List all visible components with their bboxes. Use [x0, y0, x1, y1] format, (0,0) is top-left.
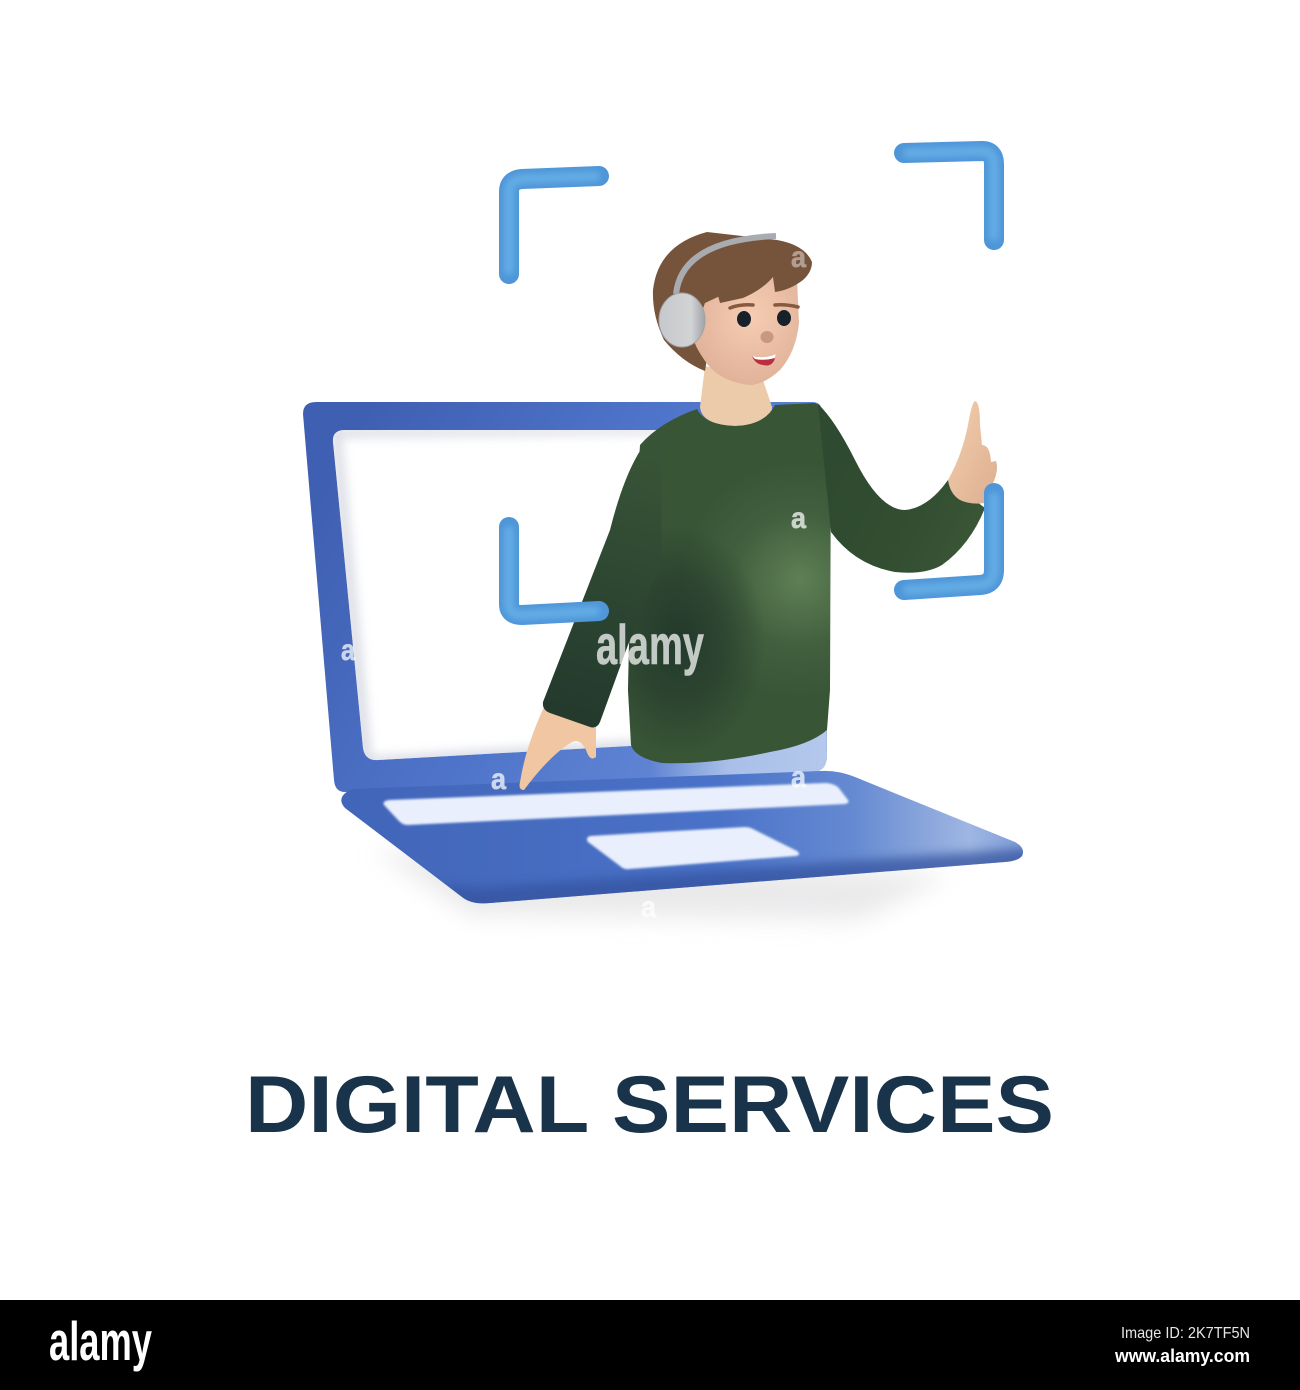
right hand: [948, 401, 997, 504]
eyebrows: [730, 305, 798, 308]
mouth: [752, 354, 776, 366]
fringe: [677, 238, 812, 303]
laptop shadow: [375, 850, 950, 920]
footer logo: alamy: [49, 1310, 152, 1372]
base front edge shading: [440, 848, 1030, 912]
website: www.alamy.com: [1114, 1346, 1250, 1366]
focus brackets: [509, 151, 994, 615]
person: body and arms: [520, 366, 997, 790]
left hand: [520, 705, 596, 790]
laptop base: [341, 771, 1023, 903]
image id: Image ID: 2K7TF5N: [1121, 1325, 1250, 1342]
watermark: alamy: a: [791, 502, 806, 535]
laptop lid pale right edge: [640, 730, 827, 778]
neck: [700, 366, 772, 426]
person: head with headset: [653, 232, 812, 385]
watermark: alamy: a: [791, 761, 806, 794]
watermark: alamy: a: [491, 763, 506, 796]
title: DIGITAL SERVICES: [245, 1060, 1054, 1150]
eyes: [737, 311, 751, 327]
watermark: alamy: a: [341, 634, 355, 667]
face: [693, 270, 799, 385]
watermark: alamy: [341, 241, 806, 924]
hair back: [653, 232, 790, 371]
sweater torso: [628, 403, 831, 763]
bracket top left: [509, 176, 599, 274]
ear cup: [659, 293, 705, 347]
headband: [676, 236, 776, 294]
laptop lid: [303, 402, 827, 792]
nose: [760, 331, 774, 343]
watermark: alamy: a: [641, 891, 656, 924]
footer bar: [0, 1300, 1300, 1390]
watermark: alamy: a: [791, 241, 806, 274]
left sleeve: [543, 428, 662, 727]
trackpad: [587, 827, 799, 869]
laptop screen: [333, 430, 700, 760]
bracket bottom right: [904, 493, 994, 590]
bracket top right: [904, 151, 994, 240]
keyboard: [384, 783, 849, 825]
screen inner shadow: [333, 430, 656, 760]
sweater shading: [628, 403, 831, 763]
bracket bottom left: [509, 527, 599, 615]
illustration: laptop: [303, 402, 1030, 912]
right sleeve: [818, 404, 985, 573]
watermark: alamy: alamy: [596, 613, 704, 676]
